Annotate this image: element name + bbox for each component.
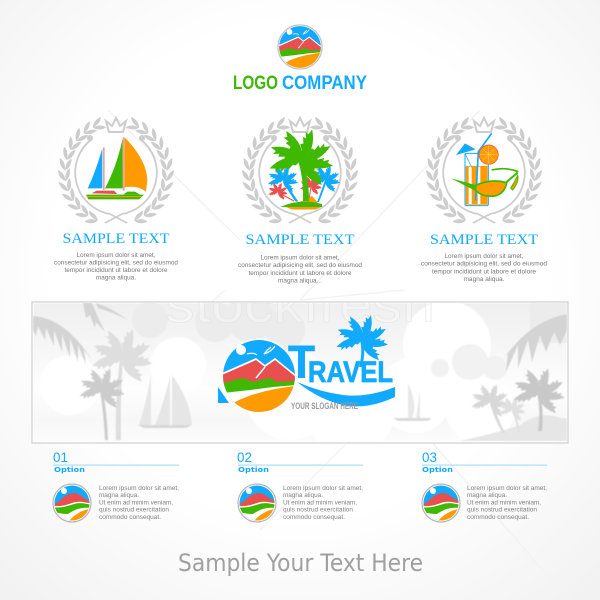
icon: palm island <box>268 128 340 210</box>
option text 02: quis nostrud exercitation <box>283 506 353 514</box>
wreath 3 <box>426 117 542 226</box>
icon: cocktail and sunglasses <box>451 133 518 206</box>
text block 1: tempor incididunt ut labore et dolore <box>64 267 168 274</box>
option 02: Option <box>238 466 269 474</box>
icon: travel palm <box>336 314 388 367</box>
text block 2: tempor incididunt ut labore et dolore <box>248 270 352 277</box>
logo company wordmark: COMPANY <box>282 72 367 94</box>
panel: travel banner <box>31 301 569 444</box>
logo company wordmark: LOGO <box>233 72 278 94</box>
travel wordmark: RAVEL <box>308 356 393 389</box>
option 02: 02 <box>237 449 252 465</box>
palm fronds top corners <box>33 303 567 372</box>
icon 02 <box>238 484 276 522</box>
wreath 2 <box>242 117 358 226</box>
heading 1: SAMPLE TEXT <box>62 231 170 247</box>
text block 2: Lorem ipsum dolor sit amet, <box>260 254 340 262</box>
text block 2: consectetur adipisicing elit, sed do eiusmod <box>238 262 362 269</box>
heading 2: SAMPLE TEXT <box>246 232 354 248</box>
text block 3: tempor incididunt ut labore et dolore <box>432 268 536 276</box>
text block 1: magna aliqua. <box>96 274 136 282</box>
panel: sailboat badge <box>54 117 178 282</box>
option 03: Option <box>422 466 453 474</box>
option text 01: Ut enim ad minim veniam, <box>99 500 173 506</box>
text block 3 <box>421 253 547 283</box>
travel wordmark: T <box>288 336 315 388</box>
option 02 <box>237 449 363 522</box>
top logo icon <box>278 25 322 70</box>
text block 1 <box>54 252 178 282</box>
banner scenery <box>33 303 567 441</box>
text block 1: consectetur adipisicing elit, sed do eiusmod <box>54 260 178 266</box>
small boat silhouette <box>393 383 432 421</box>
option text 02: commodo consequat. <box>283 514 345 521</box>
option text 02: Ut enim ad minim veniam, <box>283 500 357 506</box>
option text 03: quis nostrud exercitation <box>467 506 537 514</box>
right island and palms <box>460 415 567 441</box>
option text 01 <box>99 485 179 521</box>
option text 02 <box>283 485 363 521</box>
option 03: 03 <box>422 449 437 465</box>
option text 02: Lorem ipsum dolor sit amet, <box>283 485 363 492</box>
panel: drink badge <box>421 117 547 283</box>
option text 01: quis nostrud exercitation <box>99 506 169 514</box>
text block 3: consectetur adipisicing elit, sed do eiusmod <box>421 260 547 268</box>
watermark lines <box>60 110 560 590</box>
text block 2 <box>238 254 362 284</box>
option text 01: Lorem ipsum dolor sit amet, <box>99 485 179 492</box>
option 01: Option <box>54 466 85 474</box>
travel wordmark <box>288 314 395 406</box>
option 03 <box>422 449 547 522</box>
text block 1: Lorem ipsum dolor sit amet, <box>76 252 156 259</box>
option text 03: magna aliqua. <box>467 492 507 499</box>
travel logo emblem <box>218 338 296 416</box>
panel: palm badge <box>238 117 362 284</box>
icon: sailboat <box>86 137 147 199</box>
option text 03: Lorem ipsum dolor sit amet, <box>467 485 547 492</box>
text block 3: magna aliqua. <box>464 276 505 283</box>
heading 3: SAMPLE TEXT <box>430 232 538 248</box>
logo company wordmark <box>233 72 367 94</box>
option text 03: commodo consequat. <box>467 514 529 521</box>
option text 03 <box>467 485 547 521</box>
wreath 1 <box>58 117 174 226</box>
footer text: Sample Your Text Here <box>178 549 423 577</box>
text block 2: magna aliqua... <box>278 278 322 284</box>
option text 01: commodo consequat. <box>99 514 161 521</box>
left palms <box>91 328 153 440</box>
option text 02: magna aliqua. <box>283 492 323 499</box>
option text 01: magna aliqua. <box>99 492 139 499</box>
icon 01 <box>53 484 91 522</box>
watermark text: stockfresh <box>165 277 435 333</box>
text block 3: Lorem ipsum dolor sit amet, <box>444 253 524 260</box>
icon 03 <box>422 484 460 522</box>
sailboat silhouette <box>138 375 192 428</box>
option text 03: Ut enim ad minim veniam, <box>467 500 541 506</box>
option 01 <box>53 449 179 522</box>
slogan: YOUR SLOGAN HERE <box>291 401 358 412</box>
option 01: 01 <box>53 449 68 465</box>
